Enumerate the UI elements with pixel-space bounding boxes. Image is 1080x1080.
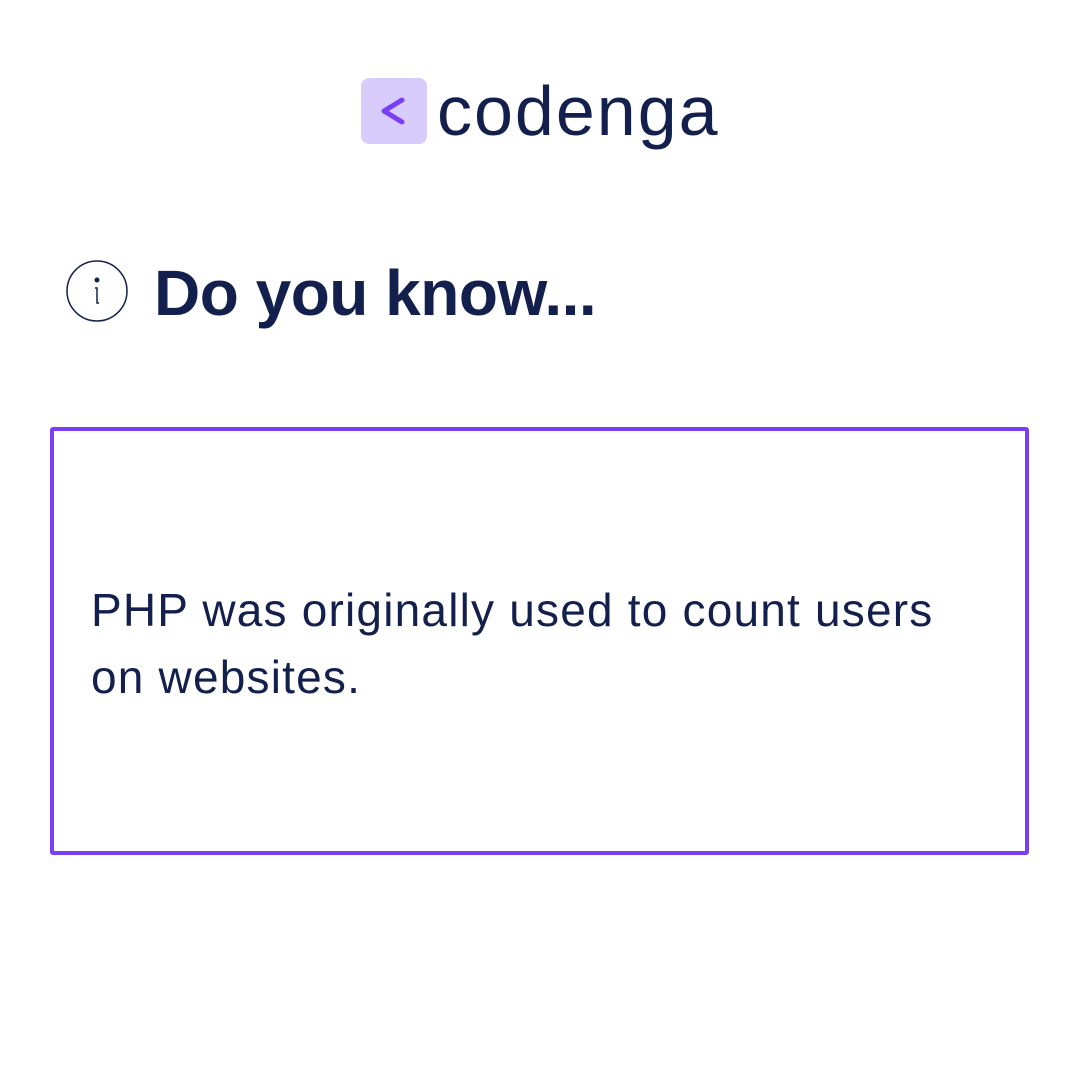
fact text bbox=[91, 584, 934, 703]
logo bbox=[361, 72, 720, 150]
fact text: on websites. bbox=[91, 651, 361, 703]
icon: info bbox=[66, 260, 128, 322]
panel: fact bbox=[50, 427, 1029, 855]
icon: logo badge bbox=[361, 78, 427, 144]
fact text: PHP was originally used to count users bbox=[91, 584, 934, 636]
title: Do you know... bbox=[154, 257, 596, 329]
wordmark: codenga bbox=[437, 72, 720, 150]
heading bbox=[66, 257, 596, 329]
